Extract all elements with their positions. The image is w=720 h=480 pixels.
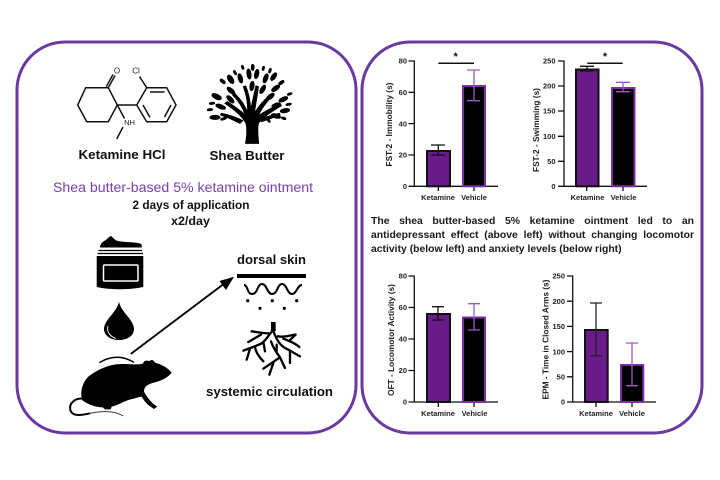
bar chart: OFT locomotor activity	[386, 272, 498, 418]
bar chart: OFT locomotor activity: 60	[399, 303, 407, 312]
bar chart: OFT locomotor activity: Ketamine	[421, 409, 455, 418]
bar chart: FST-2 immobility: FST-2 - Immobility (s)	[384, 82, 394, 166]
bar chart: EPM time in closed arms: 150	[552, 322, 565, 331]
bar chart: FST-2 immobility: Ketamine	[421, 193, 455, 202]
bar chart: EPM time in closed arms: 200	[552, 297, 565, 306]
icon: shea tree	[207, 64, 292, 143]
bar chart: FST-2 swimming	[531, 51, 647, 202]
subtitle: ointment name: Shea butter-based 5% ketamine ointment	[53, 180, 313, 195]
text: results summary	[371, 216, 694, 255]
panel: left, ointment application	[17, 42, 356, 433]
bar chart: FST-2 immobility: 40	[399, 119, 407, 128]
bar chart: EPM time in closed arms: 250	[552, 272, 565, 281]
bar chart: EPM time in closed arms: Vehicle	[619, 409, 645, 418]
bar chart: FST-2 swimming: FST-2 - Swimming (s)	[531, 88, 541, 172]
bar chart: FST-2 swimming: 50	[547, 157, 556, 166]
bar chart: FST-2 swimming: *	[603, 51, 608, 63]
bar chart: FST-2 swimming: Vehicle	[611, 193, 636, 202]
icon: ketamine molecule: Cl	[132, 66, 140, 76]
bar chart: FST-2 swimming: 0	[551, 182, 556, 191]
icon: ointment jar	[97, 236, 143, 289]
bar chart: FST-2 immobility: *	[454, 51, 459, 63]
text: application frequency: x2/day	[171, 216, 211, 228]
bar chart: OFT locomotor activity: Vehicle	[462, 409, 487, 418]
icon: oil drop	[104, 302, 134, 340]
bar chart: EPM time in closed arms: EPM - Time in Closed Arms (s)	[540, 279, 550, 399]
bar chart: OFT locomotor activity: 0	[403, 398, 407, 407]
text: application duration: 2 days of application	[132, 200, 250, 212]
icon: ketamine molecule: O	[114, 66, 120, 76]
icon: skin layer	[237, 274, 306, 310]
label: dorsal skin: dorsal skin	[237, 252, 306, 267]
bar chart: FST-2 swimming: 250	[543, 57, 556, 66]
bar chart: OFT locomotor activity: 40	[399, 335, 407, 344]
bar chart: FST-2 immobility: Vehicle	[461, 193, 487, 202]
icon: ketamine molecule	[78, 66, 176, 139]
bar chart: EPM time in closed arms	[540, 272, 656, 418]
bar chart: EPM time in closed arms: Ketamine	[579, 409, 613, 418]
bar chart: EPM time in closed arms: 50	[557, 372, 565, 382]
bar chart: FST-2 swimming: 100	[543, 132, 556, 141]
bar chart: FST-2 immobility: 0	[403, 182, 407, 191]
bar chart: OFT locomotor activity: OFT - Locomotor Activity (s)	[386, 284, 396, 396]
bar chart: FST-2 immobility: 20	[399, 151, 407, 160]
text: results summary: activity (below left) and anxiety levels (below right)	[371, 244, 622, 255]
label: Shea Butter: Shea Butter	[210, 148, 284, 163]
bar chart: FST-2 immobility: 80	[399, 57, 407, 66]
bar chart: FST-2 immobility	[384, 51, 498, 202]
panel: right, behavioural results	[362, 42, 702, 433]
bar chart: OFT locomotor activity: 80	[399, 272, 407, 281]
bar chart: OFT locomotor activity: 20	[399, 366, 407, 375]
bar chart: FST-2 swimming: 150	[543, 107, 556, 116]
text: results summary: antidepressant effect (above left) without changing locomotor	[371, 230, 694, 241]
icon: ketamine molecule: NH	[124, 118, 135, 127]
bar chart: EPM time in closed arms: 0	[561, 398, 565, 407]
label: systemic circulation: systemic circulation	[206, 384, 333, 399]
bar chart: FST-2 immobility: 60	[399, 88, 407, 97]
icon: rat	[70, 357, 172, 416]
icon: circulation roots	[243, 322, 300, 375]
arrow: rat to dorsal skin	[131, 277, 234, 354]
bar chart: FST-2 swimming: 200	[543, 82, 556, 91]
label: Ketamine HCl: Ketamine HCl	[78, 147, 166, 162]
bar chart: FST-2 swimming: Ketamine	[571, 193, 604, 202]
text: results summary: The shea butter-based 5% ketamine ointment led to an	[371, 216, 694, 226]
bar chart: EPM time in closed arms: 100	[552, 347, 565, 356]
